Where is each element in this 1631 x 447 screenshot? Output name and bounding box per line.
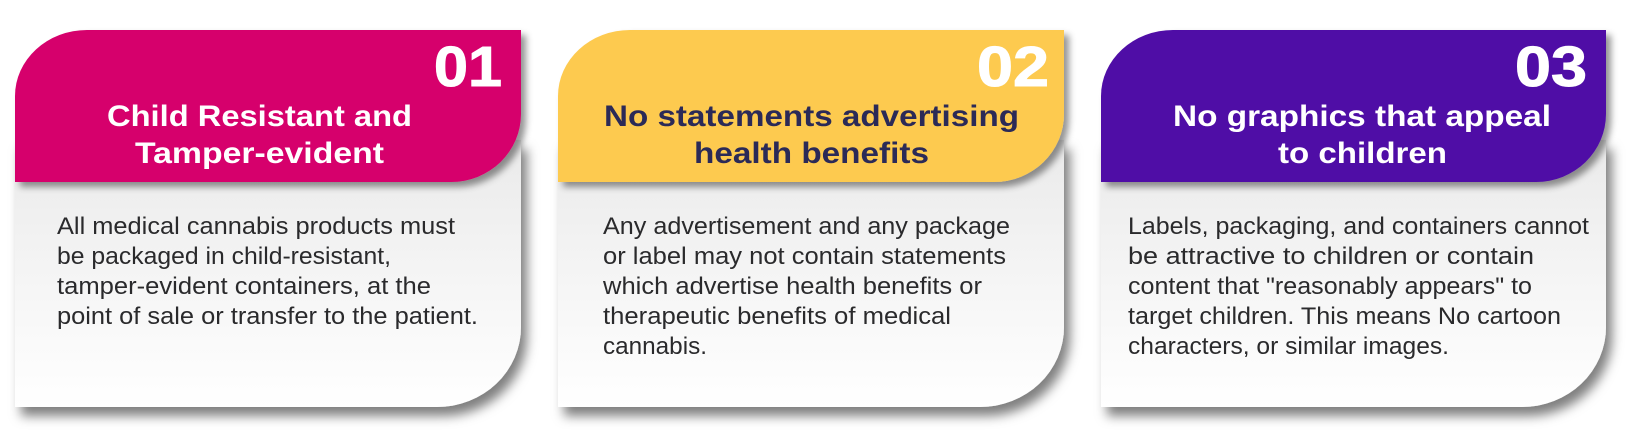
card 1 heading <box>107 100 412 170</box>
card 3 number: 03 <box>1515 35 1587 99</box>
card 2 heading: health benefits <box>694 137 929 170</box>
card 3 body text: content that "reasonably appears" to <box>1128 273 1532 300</box>
card 3 heading: No graphics that appeal <box>1173 100 1551 133</box>
card 1 body text: tamper-evident containers, at the <box>57 273 431 300</box>
panel: card 1 <box>15 30 521 407</box>
card 1 number: 01 <box>434 35 502 99</box>
card 2 heading: No statements advertising <box>604 100 1019 133</box>
card 2 heading <box>604 100 1019 170</box>
card 1 header banner <box>15 30 521 182</box>
card 2 body background <box>558 140 1064 407</box>
panel: card 2 <box>558 30 1064 407</box>
card 1 heading: Tamper-evident <box>135 137 384 170</box>
card 1 body text: be packaged in child-resistant, <box>57 243 391 270</box>
card 2 body text: or label may not contain statements <box>603 243 1006 270</box>
card 1 body text: point of sale or transfer to the patient. <box>57 303 478 330</box>
card 1 body background <box>15 140 521 407</box>
card 3 body text: characters, or similar images. <box>1128 333 1449 360</box>
card 1 body text <box>57 213 478 330</box>
card 3 body text: be attractive to children or contain <box>1128 243 1534 270</box>
card 1 body text: All medical cannabis products must <box>57 213 455 240</box>
card 3 body background <box>1101 140 1606 407</box>
card 3 header banner <box>1101 30 1606 182</box>
card 2 body text <box>602 213 1010 360</box>
card 2 number: 02 <box>977 35 1049 99</box>
card 2 body text: therapeutic benefits of medical <box>603 303 951 330</box>
panel: card 3 <box>1101 30 1606 407</box>
card 2 body text: which advertise health benefits or <box>602 273 982 300</box>
card 3 heading <box>1173 100 1551 170</box>
card 3 body text: target children. This means No cartoon <box>1128 303 1561 330</box>
card 3 heading: to children <box>1278 137 1447 170</box>
card 1 heading: Child Resistant and <box>107 100 412 133</box>
card 2 body text: Any advertisement and any package <box>603 213 1010 240</box>
card 3 body text <box>1128 213 1589 360</box>
card 2 body text: cannabis. <box>603 333 707 360</box>
card 3 body text: Labels, packaging, and containers cannot <box>1128 213 1589 240</box>
card 2 header banner <box>558 30 1064 182</box>
